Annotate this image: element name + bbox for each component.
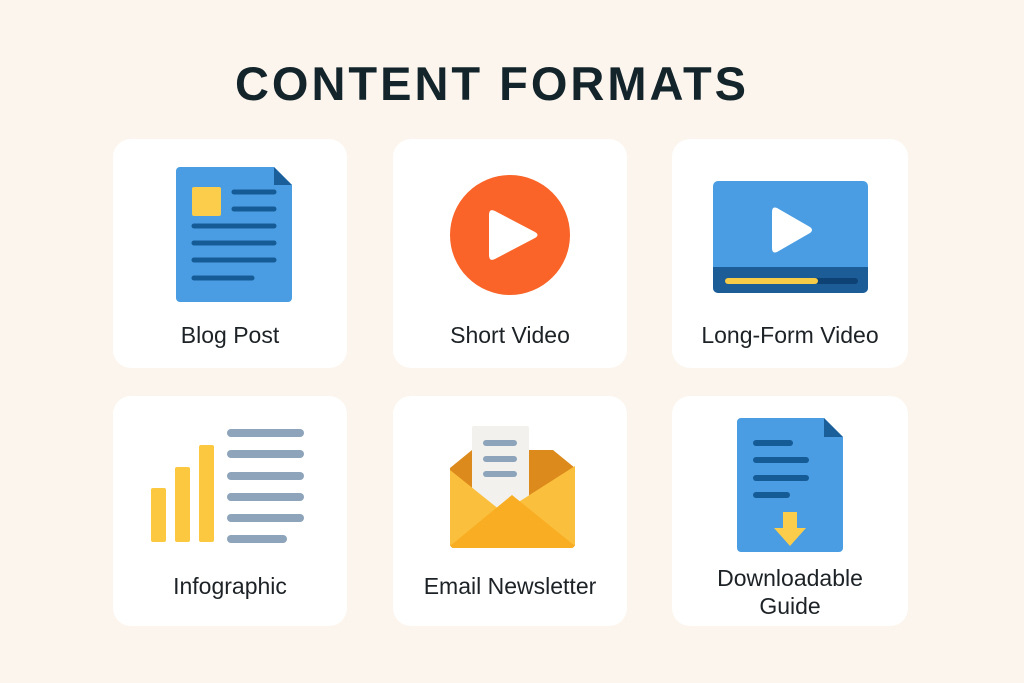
panel: blog post: Blog Post bbox=[181, 322, 279, 348]
panel: long-form video bbox=[672, 139, 908, 368]
icon: video player bbox=[713, 181, 868, 293]
icon: blog document bbox=[176, 167, 292, 302]
icon: bar chart with lines bbox=[151, 433, 300, 542]
icon: play circle bbox=[450, 175, 570, 295]
panel: long-form video: Long-Form Video bbox=[701, 322, 879, 348]
panel: short video: Short Video bbox=[450, 322, 570, 348]
panel: downloadable guide bbox=[672, 396, 908, 626]
panel: email newsletter: Email Newsletter bbox=[424, 573, 596, 599]
panel: infographic bbox=[113, 396, 347, 626]
icon: envelope bbox=[450, 426, 575, 548]
panel: downloadable guide: Downloadable bbox=[717, 565, 863, 591]
panel: blog post bbox=[113, 139, 347, 368]
panel: downloadable guide: Guide bbox=[759, 593, 821, 619]
panel: email newsletter bbox=[393, 396, 627, 626]
panel: infographic: Infographic bbox=[173, 573, 287, 599]
title: CONTENT FORMATS bbox=[235, 57, 749, 110]
icon: download guide bbox=[737, 418, 843, 552]
panel: short video bbox=[393, 139, 627, 368]
